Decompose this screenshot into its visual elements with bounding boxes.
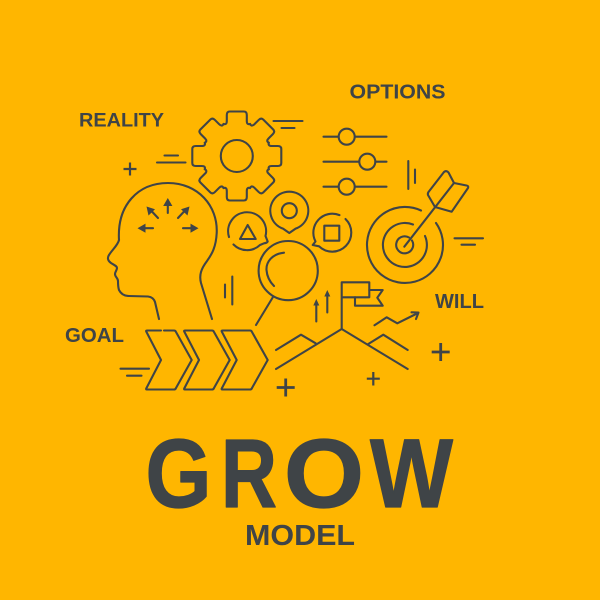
label: reality: REALITY (79, 110, 164, 132)
title: W (370, 419, 453, 528)
label: goal: GOAL (65, 324, 124, 347)
accent lines: next to magnifier (225, 276, 232, 304)
icon: plus right (432, 343, 450, 361)
icon: square speech bubble (313, 214, 351, 252)
icon: circle pin bubble (270, 192, 308, 233)
accent lines: gear left (157, 156, 186, 162)
icon: sliders (324, 129, 386, 195)
icon: mountain with flag (276, 282, 408, 369)
title (146, 419, 453, 528)
icon: plus bottom centre (367, 372, 380, 386)
accent lines: chevrons left (120, 369, 149, 376)
subtitle: MODEL (245, 520, 355, 552)
icon: target with dart (367, 171, 468, 283)
icon: plus bottom left (277, 378, 295, 396)
icon: gear (192, 112, 281, 200)
title: R (221, 419, 277, 528)
icon: triangle speech bubble (228, 212, 268, 250)
title: G (146, 419, 212, 528)
icon: thought arrows in head (138, 198, 198, 233)
icon: growth zigzag arrow (374, 312, 418, 325)
accent lines: gear right (274, 121, 302, 128)
icon: up arrows (313, 290, 330, 322)
title: O (284, 419, 364, 528)
label: will: WILL (435, 291, 484, 313)
icon: plus near head (124, 162, 136, 176)
icon: head profile (108, 183, 217, 319)
icon: magnifier (256, 241, 318, 325)
accent lines: next to sliders (408, 161, 415, 189)
accent lines: target right (454, 238, 483, 245)
label: options: OPTIONS (350, 82, 446, 104)
icon: chevrons (146, 330, 268, 390)
